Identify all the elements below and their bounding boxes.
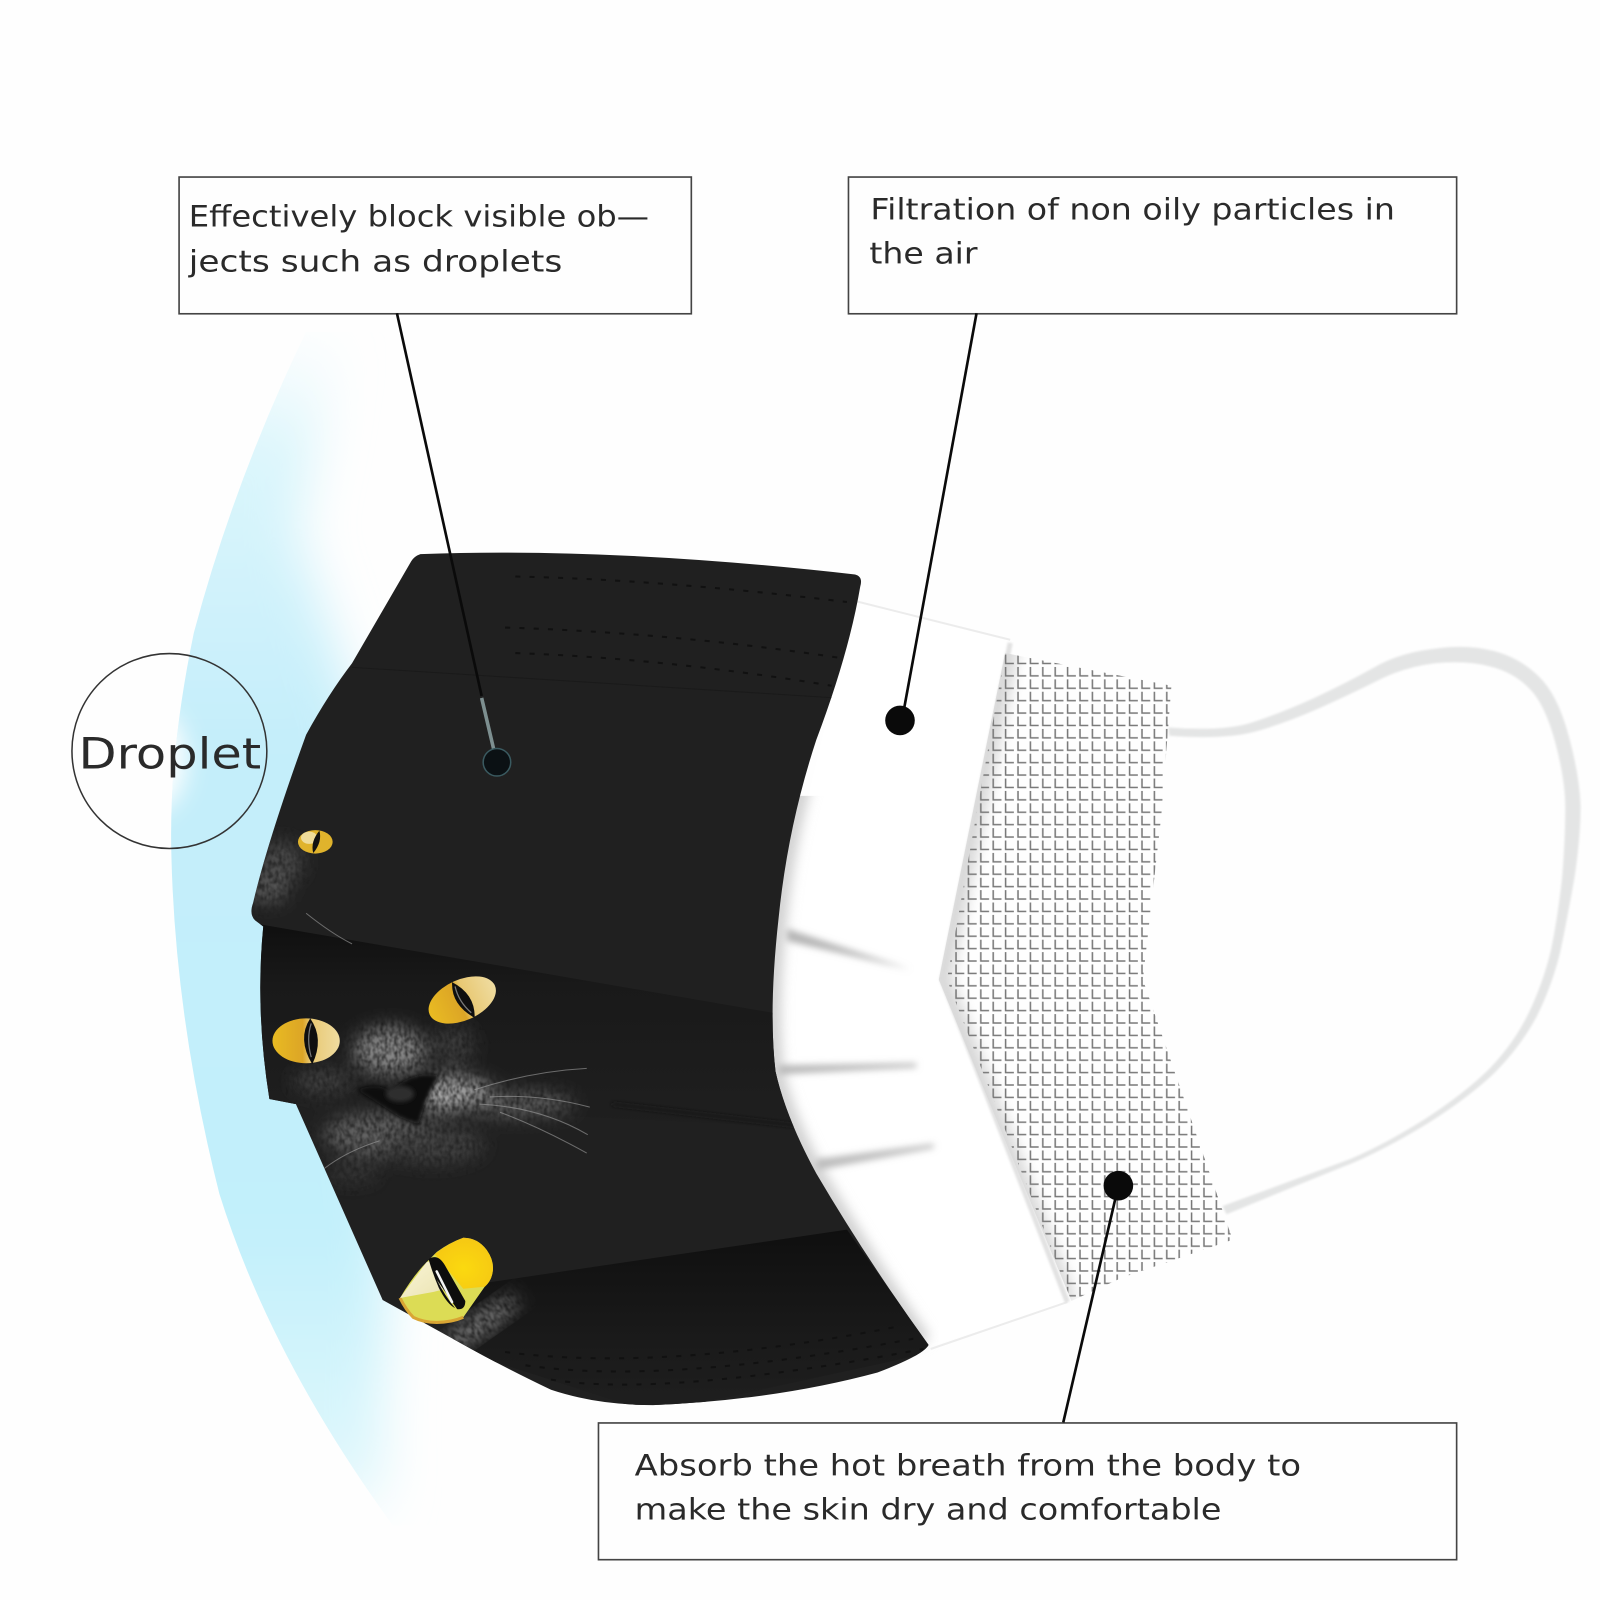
- pleat shadows: [779, 929, 934, 1170]
- shadow cast by black layer: [773, 740, 923, 1342]
- stitching dots: [505, 577, 923, 1385]
- callout text: the air: [869, 236, 978, 270]
- lower mask folds: [247, 577, 934, 1413]
- leader line: filtration: [885, 313, 977, 735]
- small top eye: [298, 830, 333, 854]
- small cat fur top: [247, 842, 303, 902]
- top and bottom edges of white layer: [855, 601, 1067, 1349]
- mask body: [251, 553, 929, 1405]
- callout box: filtration: [848, 177, 1457, 314]
- callout text: Absorb the hot breath from the body to: [635, 1449, 1301, 1483]
- callout text: jects such as droplets: [188, 244, 562, 278]
- left cat eye: [272, 1018, 340, 1064]
- black mask front with cat print: [247, 553, 934, 1413]
- white inner layer of mask: [772, 600, 1067, 1349]
- whiskers: [306, 913, 590, 1168]
- droplet label circle: [72, 654, 267, 848]
- leader line: absorb: [1063, 1171, 1133, 1422]
- inner layer edge: [942, 643, 1067, 1302]
- cat face fur: [293, 1026, 574, 1182]
- leader line: droplets: [397, 313, 511, 776]
- callout box: absorb: [598, 1423, 1457, 1560]
- grid inner lining: [942, 643, 1233, 1302]
- ear loop: [1168, 647, 1581, 1214]
- callout text: Filtration of non oily particles in: [870, 192, 1395, 226]
- callout box: droplets: [179, 177, 691, 314]
- lower cat eye: [400, 1238, 493, 1322]
- callout text: Effectively block visible ob—: [189, 200, 649, 234]
- cat nose: [357, 1074, 439, 1124]
- right cat eye: [421, 967, 504, 1034]
- fur beside lower eye: [440, 1286, 525, 1350]
- white spray patch inside droplet circle: [172, 712, 198, 816]
- blue droplet spray arc: [171, 364, 408, 1503]
- droplet label: Droplet: [79, 729, 261, 779]
- callout text: make the skin dry and comfortable: [635, 1492, 1221, 1526]
